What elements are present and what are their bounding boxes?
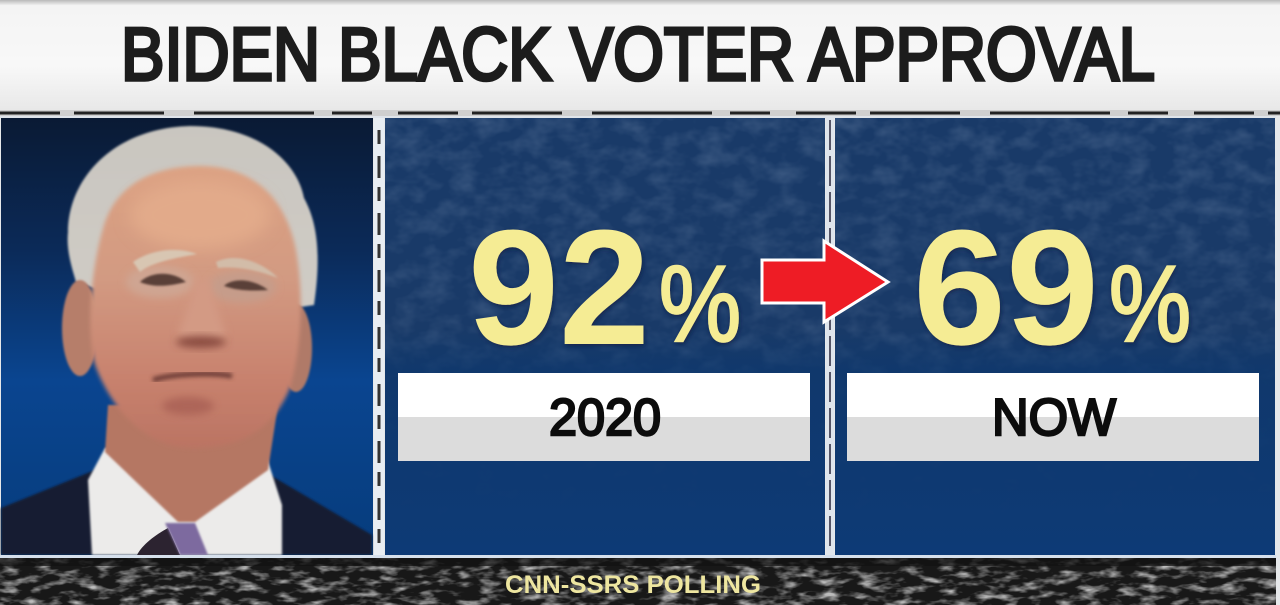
left brow bbox=[133, 250, 197, 272]
value: 92%: 92 bbox=[468, 196, 650, 379]
label: 2020 bbox=[398, 373, 810, 461]
nostril shadow bbox=[176, 336, 226, 348]
torn strip under the banner bbox=[0, 110, 1280, 116]
panel dividers bbox=[0, 116, 1276, 558]
value: 69% bbox=[913, 196, 1191, 379]
value: 92% bbox=[468, 196, 741, 379]
shirt collar bbox=[88, 448, 282, 555]
footer strip bbox=[0, 558, 1276, 605]
title: BIDEN BLACK VOTER APPROVAL bbox=[121, 12, 1155, 96]
label: 2020: 2020 bbox=[549, 389, 661, 447]
right eye socket bbox=[208, 271, 276, 303]
hair bbox=[68, 126, 318, 310]
left ear bbox=[62, 280, 98, 376]
forehead highlight bbox=[130, 181, 270, 249]
suit jacket bbox=[1, 470, 372, 555]
value: 92%: % bbox=[659, 243, 741, 364]
right eye bbox=[224, 280, 268, 291]
left eye socket bbox=[126, 266, 194, 298]
neck bbox=[105, 405, 278, 522]
face bbox=[90, 166, 301, 448]
right ear bbox=[280, 304, 312, 392]
label: now: NOW bbox=[992, 389, 1116, 447]
title banner bbox=[0, 0, 1280, 110]
lip shadow bbox=[162, 397, 214, 415]
left eye bbox=[140, 274, 186, 286]
panel: now bbox=[835, 118, 1275, 555]
panel: 2020 bbox=[385, 118, 825, 555]
tie bbox=[137, 523, 208, 555]
label: now bbox=[847, 373, 1259, 461]
value: 69%: % bbox=[1109, 243, 1191, 364]
arrow: red arrow from 92% to 69% bbox=[762, 241, 888, 322]
value: 69%: 69 bbox=[913, 196, 1099, 379]
right brow bbox=[216, 258, 278, 278]
source caption: CNN-SSRS POLLING bbox=[505, 571, 761, 599]
mouth bbox=[153, 374, 232, 380]
nose bridge bbox=[178, 280, 226, 343]
panel: portrait bbox=[1, 118, 373, 555]
